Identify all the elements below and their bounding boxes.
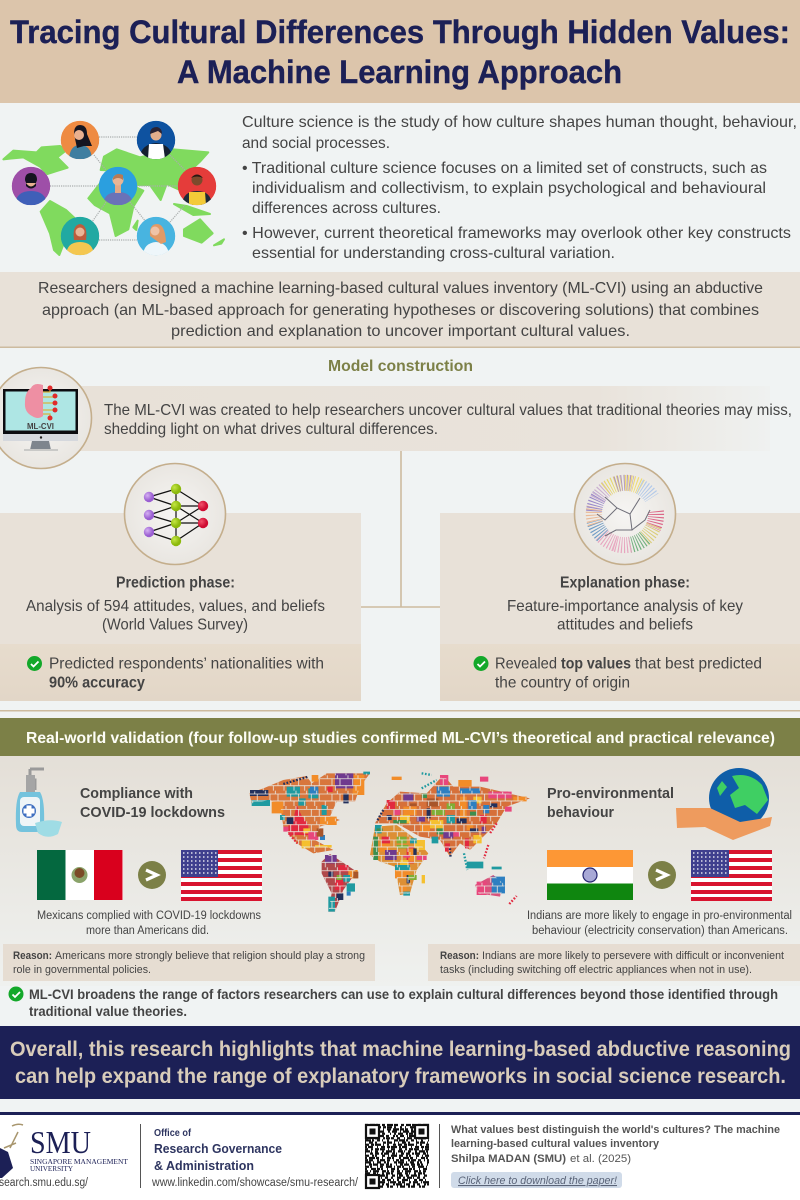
paper citation: Shilpa MADAN (SMU) (451, 1153, 566, 1165)
icon: greater than (138, 861, 166, 889)
connector lines (361, 451, 440, 607)
result strip: prediction (0, 644, 361, 701)
section background (0, 756, 800, 986)
panel: compliance with COVID-19 lockdowns: Mexicans complied with COVID-19 lockdowns (37, 910, 261, 922)
reason box: left: Americans more strongly believe that religion should play a strong (55, 950, 365, 962)
icon: globe in hand (676, 768, 772, 840)
intro text: differences across cultures. (252, 200, 441, 217)
paper citation: learning-based cultural values inventory (451, 1138, 660, 1150)
footer (0, 1112, 800, 1200)
paper citation: What values best distinguish the world's cultures? The machine (451, 1124, 780, 1136)
icon: ML-CVI monitor: ML-CVI (27, 422, 54, 431)
result strip: explanation: that best predicted (635, 656, 762, 672)
intro text: essential for understanding cross-cultural variation. (252, 245, 615, 262)
divider (0, 710, 800, 712)
panel: pro-environmental behaviour: Pro-environmental (547, 785, 674, 802)
icon: world map with connected people (3, 121, 224, 255)
reason box: right: tasks (including switching off electric appliances when not in use). (440, 964, 752, 976)
reason box: right (428, 944, 800, 981)
panel: explanation phase: attitudes and beliefs (557, 616, 693, 634)
QR code (365, 1125, 429, 1188)
person: orange (61, 121, 99, 159)
reason box: left: role in governmental policies. (13, 964, 151, 976)
panel: prediction phase: Analysis of 594 attitudes, values, and beliefs (26, 598, 325, 615)
panel: pro-environmental behaviour: Indians are more likely to engage in pro-environmental (527, 910, 792, 922)
flag: USA (691, 850, 772, 901)
panel: pro-environmental behaviour: behaviour (547, 804, 614, 821)
download button: Click here to download the paper! (458, 1175, 617, 1187)
flag: USA (181, 850, 262, 901)
flag: India (547, 850, 633, 900)
panel: prediction phase (0, 513, 361, 701)
person: light blue (137, 217, 175, 255)
summary band (0, 272, 800, 348)
person: red (178, 167, 216, 205)
person: teal (61, 217, 99, 255)
panel: compliance with COVID-19 lockdowns: COVID-19 lockdowns (80, 804, 225, 821)
paper citation: et al. (2025) (570, 1153, 631, 1165)
panel: explanation phase: Explanation phase: (560, 574, 690, 592)
panel: pro-environmental behaviour: behaviour (electricity conservation) than Americans. (532, 925, 788, 937)
flag: Mexico (37, 850, 123, 900)
panel: compliance with COVID-19 lockdowns: more than Americans did. (86, 925, 209, 937)
result strip: prediction: Predicted respondents’ nationalities with (49, 656, 324, 672)
footer: www.linkedin.com/showcase/smu-research/ (151, 1177, 359, 1189)
result strip: explanation: Revealed (495, 656, 557, 672)
intro text: Culture science is the study of how culture shapes human thought, behaviour, (242, 114, 797, 131)
office name: & Administration (154, 1158, 254, 1173)
person: blue (137, 121, 175, 159)
intro text: individualism and collectivism, to explain psychological and behavioural (252, 180, 766, 197)
office name (154, 1128, 282, 1173)
conclusion banner (0, 1026, 800, 1099)
intro text: and social processes. (242, 135, 390, 152)
icon: ML-CVI monitor (0, 368, 92, 468)
title banner (0, 0, 800, 103)
panel: pro-environmental behaviour (527, 768, 792, 937)
world map mosaic (240, 767, 533, 913)
panel: explanation phase (440, 513, 800, 701)
icon: greater than (648, 861, 676, 889)
person: purple (12, 167, 50, 205)
result strip: prediction: 90% accuracy (49, 674, 145, 692)
icon: neural network (124, 464, 226, 564)
panel: explanation phase: Feature-importance analysis of key (507, 598, 743, 615)
SMU logo: SMU (30, 1124, 91, 1160)
title banner: A Machine Learning Approach (177, 54, 622, 90)
intro text (242, 114, 797, 262)
icon: sanitizer and mask (16, 769, 62, 837)
footer: search.smu.edu.sg/ (0, 1177, 89, 1189)
reason box: left: Reason: (13, 950, 52, 962)
panel: compliance with COVID-19 lockdowns: Compliance with (80, 785, 193, 802)
reason box: right: Indians are more likely to persevere with difficult or inconvenient (482, 950, 784, 962)
summary band: approach (an ML-based approach for generating hypotheses or discovering solutions) that combines (42, 302, 759, 319)
takeaway (8, 986, 778, 1019)
result strip: explanation: top values (561, 656, 631, 672)
SMU logo (0, 1124, 129, 1178)
heading band: real-world validation: Real-world validation (four follow-up studies confirmed ML-CVI’s theoretical and practical relevance) (26, 730, 775, 747)
result strip: explanation: the country of origin (495, 674, 630, 692)
takeaway: traditional value theories. (29, 1003, 187, 1019)
panel: prediction phase: (World Values Survey) (102, 616, 248, 634)
ML-CVI description band: shedding light on what drives cultural differences. (104, 421, 438, 438)
icon: phylogenetic tree (574, 464, 676, 564)
summary band: Researchers designed a machine learning-based cultural values inventory (ML-CVI) using an abductive (38, 280, 763, 297)
heading band: real-world validation (0, 718, 800, 756)
panel: compliance with COVID-19 lockdowns (16, 769, 262, 937)
paper citation (451, 1124, 780, 1165)
reason box: right: Reason: (440, 950, 479, 962)
summary band: prediction and explanation to uncover important cultural values. (171, 323, 630, 340)
office name: Research Governance (154, 1141, 282, 1156)
SMU logo: SINGAPORE MANAGEMENT (30, 1158, 129, 1166)
SMU logo: UNIVERSITY (30, 1165, 73, 1173)
intro text: • Traditional culture science focuses on a limited set of constructs, such as (242, 160, 767, 177)
reason box: left (3, 944, 375, 981)
office name: Office of (154, 1128, 192, 1139)
title banner: Tracing Cultural Differences Through Hidden Values: (10, 14, 790, 50)
person: centre blue (99, 167, 137, 205)
result strip: explanation (440, 644, 800, 701)
ML-CVI description band (80, 386, 792, 451)
panel: prediction phase: Prediction phase: (116, 574, 235, 592)
intro text: • However, current theoretical frameworks may overlook other key constructs (242, 225, 791, 242)
heading: model construction: Model construction (328, 358, 473, 375)
